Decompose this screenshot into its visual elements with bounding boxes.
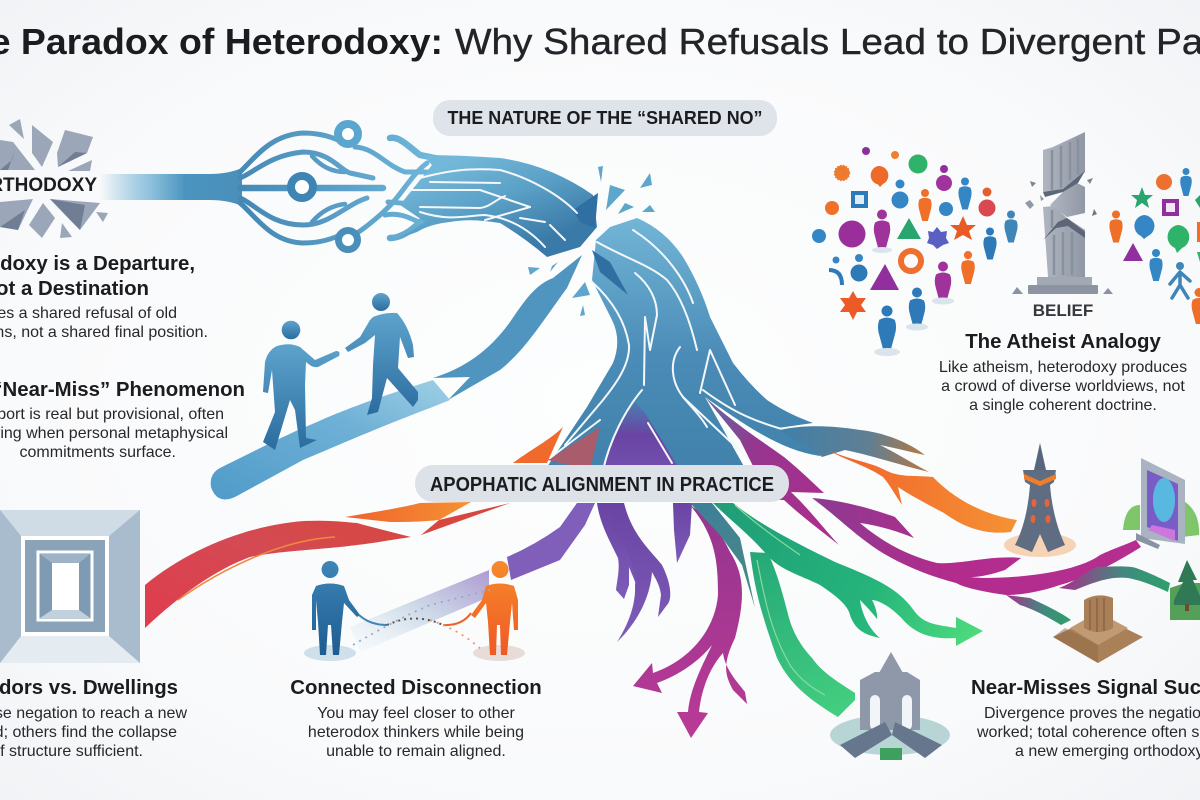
text block: atheist analogy <box>939 331 1187 414</box>
flow: magenta arrows <box>633 505 747 738</box>
flow: teal branch to broken column <box>1006 595 1071 625</box>
heading pill: apophatic alignment: APOPHATIC ALIGNMENT IN PRACTICE <box>430 474 774 496</box>
flow: lavender band through the connected figures <box>507 503 595 580</box>
label: belief: BELIEF <box>1033 301 1093 320</box>
flow: main blue trunk <box>545 218 820 495</box>
flow: orange branch to tower <box>828 450 1017 533</box>
text block: atheist analogy: The Atheist Analogy <box>965 331 1161 353</box>
flow: upper blue mass <box>395 155 598 257</box>
title: Why Shared Refusals Lead to Divergent Paths <box>455 21 1200 62</box>
figures: two people reaching out <box>263 293 418 450</box>
heading pill: apophatic alignment <box>415 465 789 502</box>
title <box>0 21 1200 62</box>
text block: connected disconnection: You may feel closer to other <box>317 705 516 722</box>
icon: shattered orthodoxy stone <box>0 119 108 238</box>
flow: orange tip above the pill <box>513 427 563 463</box>
icon: shatter fragments <box>528 166 655 316</box>
text block: near-miss phenomenon: commitments surface. <box>20 444 176 461</box>
figures: connected disconnection pair <box>304 561 525 661</box>
text block: atheist analogy: a crowd of diverse worldviews, not <box>941 378 1185 395</box>
text block: near-miss phenomenon <box>0 379 245 461</box>
text block: atheist analogy: Like atheism, heterodoxy produces <box>939 359 1187 376</box>
icon: broken column base <box>1053 595 1143 663</box>
text block: connected disconnection: heterodox thinkers while being <box>308 724 524 741</box>
flow: purple tendrils <box>597 503 692 642</box>
flow: red stream to corridors <box>145 502 510 628</box>
flow: blue to orange branch <box>780 426 929 472</box>
icon: glowing portal <box>1123 458 1199 549</box>
icon: fractured belief column <box>1012 132 1113 294</box>
text block: near-misses signal success <box>971 677 1200 760</box>
flow: color bleed at trunk foot <box>548 400 680 470</box>
flow: teal branch to tree <box>1059 566 1170 592</box>
flow: green branch to building <box>750 552 855 717</box>
flow: pale dissolving band <box>350 570 489 652</box>
icon: crowd of diverse worldviews left <box>812 147 1018 356</box>
icon: pine tree <box>1170 560 1200 620</box>
text block: connected disconnection: Connected Disconnection <box>290 677 542 699</box>
text block: atheist analogy: a single coherent doctrine. <box>969 397 1157 414</box>
flow: teal middle strand <box>690 503 755 608</box>
text block: connected disconnection: unable to remain aligned. <box>326 743 506 760</box>
icon: nested corridor doorway <box>0 510 140 663</box>
flow: upper magenta branches <box>705 397 1141 595</box>
icon: circuit nodes <box>291 124 358 250</box>
icon: watch tower <box>1004 443 1076 557</box>
text block: connected disconnection <box>290 677 542 760</box>
flow: green arrow branch <box>713 503 983 646</box>
flow: woven circuit strands <box>240 133 445 243</box>
text block: departure not destination <box>0 253 208 341</box>
icon: crowd of diverse worldviews right <box>1109 168 1200 324</box>
icon: stone building <box>830 652 950 760</box>
flow: blue stream fading in from orthodoxy <box>100 168 242 206</box>
flow: lower left blue arm <box>433 255 582 400</box>
heading pill: the nature of the shared no <box>433 100 777 136</box>
heading pill: the nature of the shared no: THE NATURE OF THE “SHARED NO” <box>448 108 762 128</box>
text block: corridors vs dwellings <box>0 677 187 760</box>
flow: light ramp under walking figures <box>211 380 450 499</box>
